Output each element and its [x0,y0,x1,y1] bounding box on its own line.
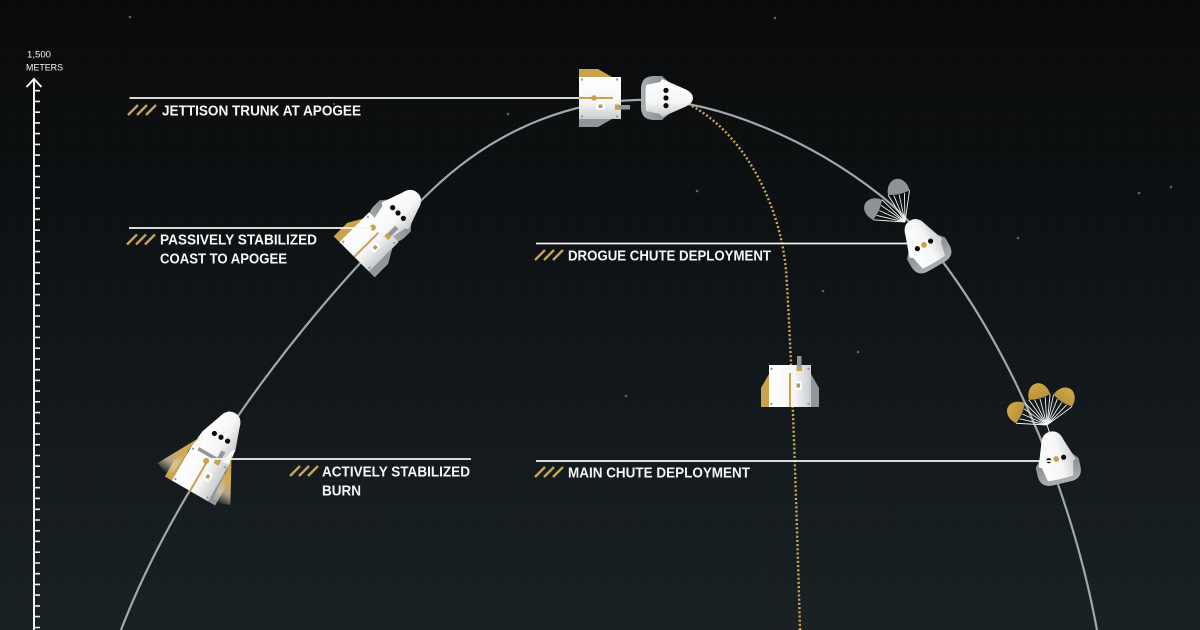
label: PASSIVELY STABILIZED [160,232,317,248]
label line [536,242,908,244]
stripes [128,105,156,115]
label: JETTISON TRUNK AT APOGEE [162,104,361,120]
stripes [535,250,563,260]
trajectory arc [121,100,1097,630]
stage: actively stabilized burn [154,392,471,512]
label: BURN [322,484,361,500]
axis arrow [26,79,42,630]
stripes [290,466,318,476]
stage: drogue chute deployment [535,177,956,278]
label: MAIN CHUTE DEPLOYMENT [568,466,750,482]
dragon with thruster plumes [154,392,271,512]
stage: passively stabilized coast [127,173,438,277]
label line [129,227,372,229]
altitude axis [26,50,63,630]
dragon [334,173,438,277]
stage: jettison trunk at apogee [128,69,693,127]
axis label: METERS [26,62,63,72]
trunk fall path [692,106,800,630]
label: DROGUE CHUTE DEPLOYMENT [568,248,771,264]
stripes [535,467,563,477]
axis label: 1,500 [27,50,51,60]
jettisoned trunk falling [761,356,819,407]
axis ticks [35,91,40,627]
drogue chutes [860,177,916,232]
trunk [579,69,630,127]
axis label [26,50,63,72]
capsule [1028,427,1083,488]
capsule [891,210,956,278]
label line [209,458,471,460]
capsule [641,76,693,120]
stripes [127,234,155,244]
label line [536,460,1052,462]
stars [129,16,1172,397]
main chutes [1003,381,1080,435]
stage: main chute deployment [535,381,1083,488]
label: ACTIVELY STABILIZED [322,464,470,480]
label line [130,97,594,99]
label: COAST TO APOGEE [160,252,287,268]
